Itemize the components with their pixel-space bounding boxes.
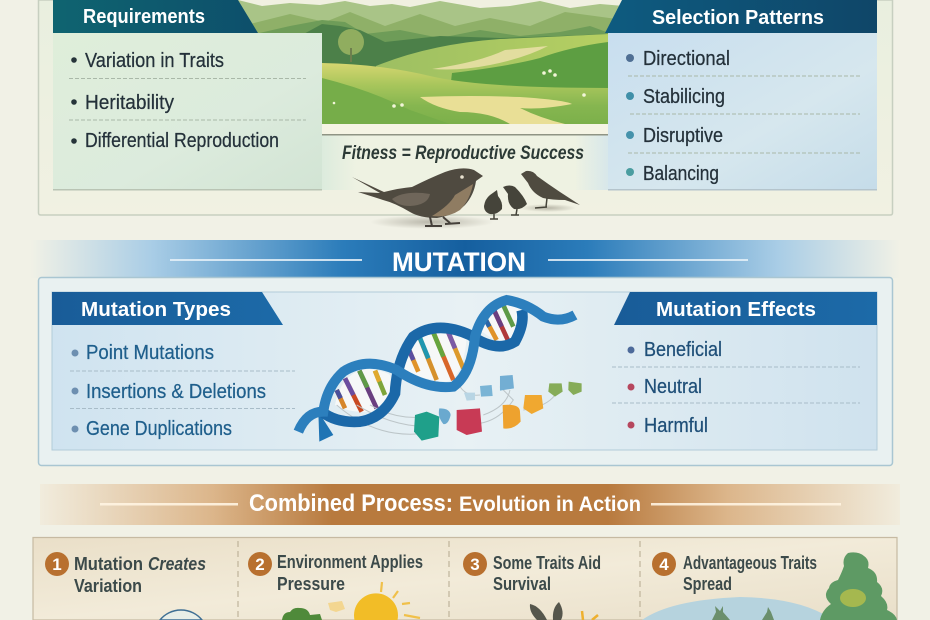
inner panel — [52, 292, 877, 450]
panel: selection patterns — [605, 0, 877, 190]
step 4 — [642, 552, 897, 620]
step title 3 second line: Survival — [493, 574, 551, 594]
step title 1 — [74, 554, 206, 574]
icon: sun and plant — [282, 582, 420, 620]
heading: mutation effects: Mutation Effects — [656, 299, 816, 321]
heading: mutation effects — [614, 292, 877, 325]
panel: natural selection — [38, 0, 892, 229]
list background — [53, 33, 322, 190]
rungs — [337, 302, 513, 412]
item: variation in traits: Variation in Traits — [85, 50, 224, 72]
step title 4: Advantageous Traits — [683, 553, 817, 573]
item: balancing: Balancing — [643, 163, 719, 185]
strands — [318, 412, 333, 442]
step title 1: Mutation — [74, 554, 143, 574]
icon: magnifier circle — [160, 610, 202, 620]
heading: requirements: Requirements — [83, 6, 205, 28]
panel: requirements — [53, 0, 322, 190]
lens backgrounds — [335, 368, 391, 412]
step number 1: 1 — [52, 555, 62, 574]
item: neutral: Neutral — [644, 376, 702, 398]
step title 4 second line: Spread — [683, 574, 732, 594]
step title 3: Some Traits Aid — [493, 553, 601, 573]
list background — [608, 33, 877, 190]
step title 1 second line: Variation — [74, 576, 142, 596]
step number 3: 3 — [470, 555, 480, 574]
item: directional: Directional — [643, 48, 730, 70]
banner: mutation — [30, 240, 900, 278]
step number 2 — [248, 552, 272, 576]
panel frame — [38, 0, 892, 215]
caption: fitness: Fitness = Reproductive Success — [342, 143, 584, 164]
step number 1 — [45, 552, 69, 576]
heading: combined process: Combined Process: — [249, 490, 453, 517]
icon: hill with rabbits — [642, 597, 830, 620]
heading: mutation types: Mutation Types — [81, 299, 231, 321]
item: disruptive: Disruptive — [643, 125, 723, 147]
panel: mutation effects — [612, 292, 877, 437]
heading: mutation types — [52, 292, 283, 325]
gene pieces — [414, 412, 439, 441]
step 3 — [463, 552, 601, 620]
panel frame — [33, 538, 897, 620]
step 1 — [45, 552, 206, 620]
step number 4 — [652, 552, 676, 576]
step title 2: Environment Applies — [277, 552, 423, 572]
panel: combined process steps — [33, 538, 897, 620]
panel frame — [38, 278, 892, 466]
item: gene duplications: Gene Duplications — [86, 418, 232, 440]
item: harmful: Harmful — [644, 415, 708, 437]
item: heritability: Heritability — [85, 92, 174, 114]
panel: mutation types — [52, 292, 295, 440]
step 2 — [248, 552, 423, 620]
heading: selection patterns: Selection Patterns — [652, 7, 824, 29]
landscape illustration — [238, 0, 624, 136]
icon: rabbit ears — [530, 602, 598, 620]
heading: selection patterns — [605, 0, 877, 33]
item: insertions and deletions: Insertions & Deletions — [86, 381, 266, 403]
item: beneficial: Beneficial — [644, 339, 722, 361]
item: point mutations: Point Mutations — [86, 342, 214, 364]
heading: requirements — [53, 0, 258, 33]
step title 2 second line: Pressure — [277, 574, 345, 594]
step number 2: 2 — [255, 555, 265, 574]
step number 4: 4 — [659, 555, 669, 574]
banner: combined process — [40, 484, 900, 525]
panel: mutation — [38, 278, 892, 466]
item: differential reproduction: Differential Reproduction — [85, 130, 279, 152]
gene connecting threads — [337, 387, 555, 434]
center column backdrop — [322, 124, 609, 190]
step title 1: Creates — [148, 554, 206, 574]
icon: birds — [352, 168, 580, 229]
heading: evolution in action: Evolution in Action — [459, 493, 641, 516]
banner: mutation: MUTATION — [392, 247, 526, 277]
item: stabilicing: Stabilicing — [643, 86, 725, 108]
icon: dna helix with gene pieces — [298, 300, 582, 442]
icon: tree — [820, 552, 897, 620]
